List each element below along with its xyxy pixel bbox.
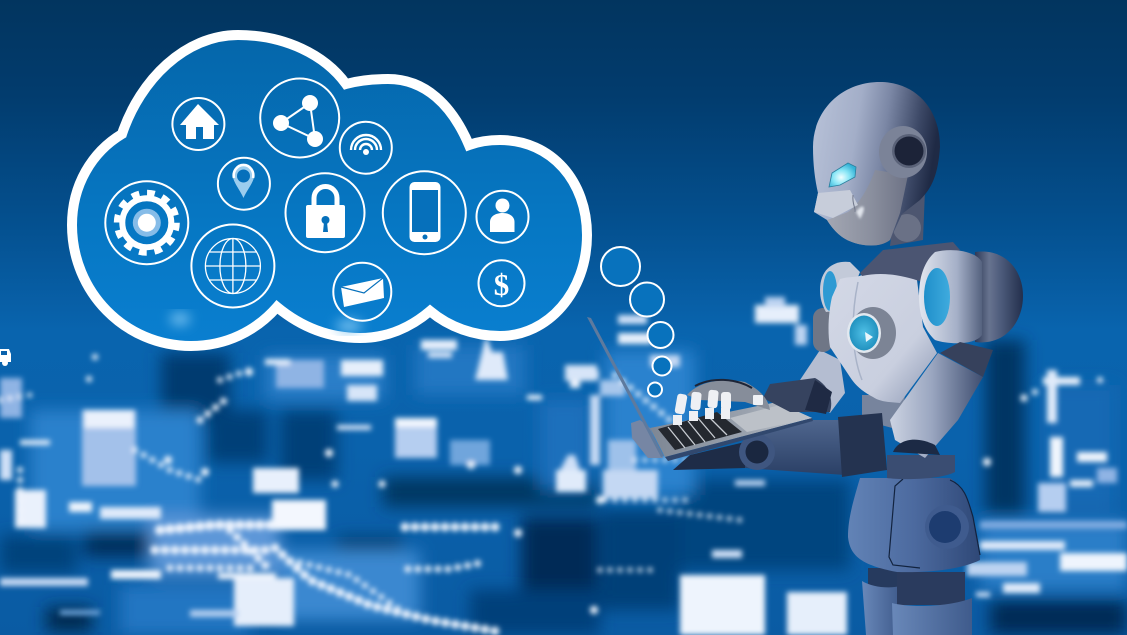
laptop bbox=[587, 317, 813, 461]
robot: near shoulder with blue panel bbox=[919, 250, 1023, 343]
laptop: keyboard bbox=[658, 412, 742, 450]
robot: lower torso bbox=[862, 395, 905, 430]
cloud shape bbox=[72, 35, 587, 346]
robot: neck bbox=[890, 190, 925, 246]
laptop: trackpad bbox=[730, 405, 812, 432]
icon: smartphone bbox=[383, 171, 466, 254]
robot: waist bbox=[887, 455, 955, 479]
thought bubbles bbox=[601, 247, 674, 396]
robot: shadow under laptop bbox=[673, 442, 746, 470]
icon: truck at left edge bbox=[0, 349, 11, 366]
robot: hip with joint bbox=[848, 478, 980, 572]
laptop: base bbox=[650, 402, 812, 457]
icon: dollar: $ bbox=[494, 267, 509, 302]
robot: typing hand bbox=[673, 378, 832, 425]
icon: padlock bbox=[286, 173, 364, 252]
icon: envelope bbox=[333, 263, 391, 321]
icon: location pin bbox=[218, 158, 270, 210]
robot: far shoulder bbox=[820, 262, 860, 312]
robot: chest bbox=[829, 242, 960, 403]
laptop: screen bbox=[587, 317, 664, 457]
robot: near forearm with cuff and elbow bbox=[739, 413, 887, 477]
icon: share network bbox=[260, 78, 339, 158]
background: blurred city lights bbox=[0, 297, 1127, 635]
robot: head bbox=[813, 82, 940, 246]
icon: globe bbox=[191, 224, 274, 308]
icon: person bbox=[476, 191, 528, 243]
cloud with service icons bbox=[72, 35, 587, 346]
robot: chest orb bbox=[847, 307, 896, 359]
robot: hand under laptop bbox=[631, 420, 663, 458]
robot: far upper arm and joint bbox=[800, 308, 845, 413]
robot bbox=[587, 82, 1023, 635]
robot: near upper arm bbox=[890, 342, 993, 458]
icon: wifi signal bbox=[340, 122, 392, 174]
icon: dollar bbox=[478, 260, 524, 306]
icon: house bbox=[172, 98, 224, 150]
icon: gear bbox=[105, 181, 188, 264]
robot: legs bbox=[862, 568, 972, 635]
